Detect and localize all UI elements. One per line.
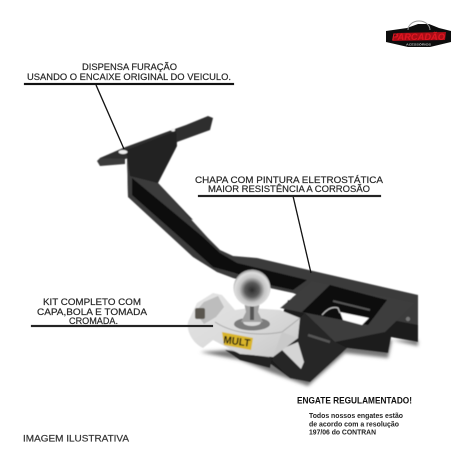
callout: dispensa furação: DISPENSA FURAÇÃO — [82, 62, 177, 73]
arm face — [127, 131, 193, 220]
shadow under hitch — [200, 340, 418, 386]
note: imagem ilustrativa: IMAGEM ILUSTRATIVA — [23, 434, 129, 444]
callout: dispensa furação: USANDO O ENCAIXE ORIGINAL DO VEICULO. — [27, 72, 231, 83]
callout: kit completo: KIT COMPLETO COM — [43, 297, 141, 308]
frame window — [302, 285, 387, 325]
shadow under coupling — [225, 350, 272, 368]
ball stem — [241, 302, 263, 322]
side flange of mounting arm — [97, 148, 125, 166]
callout: dispensa furação — [24, 62, 234, 85]
hole in arm — [118, 150, 128, 154]
coupling front edge — [215, 318, 300, 334]
callout: kit completo: CROMADA. — [69, 316, 118, 327]
leader: chapa callout — [293, 196, 311, 273]
regulation note: 197/06 do CONTRAN — [309, 430, 376, 436]
tow ball — [234, 270, 270, 306]
callout: kit completo — [31, 297, 213, 327]
callout: chapa com pintura: MAIOR RESISTÊNCIA A CORROSÃO — [208, 184, 370, 195]
callout: chapa com pintura: CHAPA COM PINTURA ELETROSTÁTICA — [195, 175, 384, 186]
dark channel on diagonal — [132, 178, 307, 290]
leader: furação callout — [96, 85, 124, 149]
logo — [386, 21, 451, 47]
callout: kit completo: CAPA,BOLA E TOMADA — [37, 307, 148, 318]
regulation note: ENGATE REGULAMENTADO! — [297, 396, 412, 406]
lower plate — [272, 313, 347, 382]
chrome coupling body — [188, 293, 300, 357]
socket cap — [195, 296, 224, 324]
view through window — [340, 312, 369, 325]
regulation note: Todos nossos engates estão — [309, 413, 403, 420]
hitch illustration — [97, 116, 418, 386]
dark underside — [268, 300, 418, 382]
callout: chapa com pintura — [195, 175, 384, 197]
white tag — [281, 342, 304, 369]
arm top edge — [100, 116, 213, 159]
ball base — [234, 318, 270, 330]
MULT label: MULT — [223, 334, 252, 350]
regulation note — [297, 396, 412, 436]
regulation note: de acordo com a resolução — [309, 422, 399, 428]
frame plate — [280, 281, 415, 342]
diagonal body — [127, 155, 418, 342]
white gap below body — [268, 292, 292, 309]
bolts — [308, 335, 330, 342]
logo: PARCADÃO — [392, 32, 445, 42]
logo: ACESSÓRIOS — [406, 42, 431, 46]
